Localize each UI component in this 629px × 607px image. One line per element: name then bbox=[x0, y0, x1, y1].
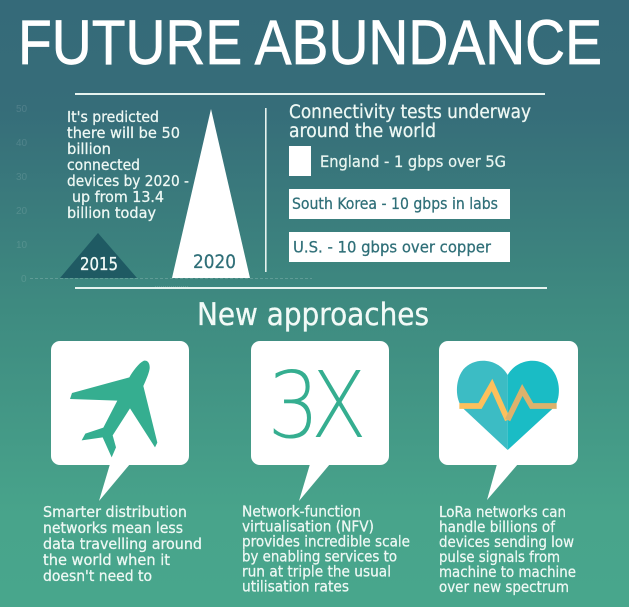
caption: machine to machine bbox=[439, 563, 576, 581]
panel: smarter distribution bbox=[43, 341, 202, 585]
icon: heart with pulse bbox=[457, 361, 559, 450]
row: South Korea bbox=[289, 189, 510, 219]
panel: connectivity tests bbox=[289, 102, 531, 262]
caption: virtualisation (NFV) bbox=[242, 518, 374, 536]
chart axis labels: 30 bbox=[16, 172, 28, 183]
stat text: 50 billion devices: devices by 2020 - bbox=[67, 172, 189, 190]
caption: networks mean less bbox=[43, 519, 183, 537]
row: U.S. bbox=[289, 232, 510, 262]
connectivity heading: around the world bbox=[289, 121, 436, 142]
caption: data travelling around bbox=[43, 535, 202, 553]
triangle bar: 2015 bbox=[60, 233, 137, 278]
row: England bbox=[289, 146, 506, 176]
caption: run at triple the usual bbox=[242, 562, 391, 580]
caption: LoRa networks can bbox=[439, 503, 566, 521]
chart axis labels: 20 bbox=[16, 206, 28, 217]
speech bubble bbox=[251, 341, 389, 501]
caption: utilisation rates bbox=[242, 578, 349, 596]
caption: doesn't need to bbox=[43, 567, 152, 585]
chart axis labels: 50 bbox=[16, 104, 28, 115]
caption: over new spectrum bbox=[439, 578, 569, 596]
stat text: 50 billion devices: there will be 50 bbox=[67, 124, 180, 142]
chart axis labels: 40 bbox=[16, 138, 28, 149]
stat text: 50 billion devices bbox=[67, 108, 189, 222]
stat text: 50 billion devices: connected bbox=[67, 156, 140, 174]
triangle bar: 2015: 2015 bbox=[80, 254, 118, 275]
stat text: 50 billion devices: billion today bbox=[67, 204, 156, 222]
caption: devices sending low bbox=[439, 533, 574, 551]
caption bbox=[43, 503, 202, 585]
row: South Korea: South Korea - 10 gbps in labs bbox=[292, 194, 498, 213]
triangle bar: 2020: 2020 bbox=[193, 251, 236, 273]
row: U.S.: U.S. - 10 gbps over copper bbox=[293, 238, 491, 256]
chart axis labels bbox=[16, 104, 28, 285]
stat text: 50 billion devices: It's predicted bbox=[67, 108, 159, 126]
triangle bar: 2020 bbox=[172, 109, 250, 278]
caption: provides incredible scale bbox=[242, 532, 410, 550]
caption: the world when it bbox=[43, 551, 171, 569]
chart axis labels: 10 bbox=[16, 240, 28, 251]
caption: handle billions of bbox=[439, 518, 556, 536]
icon: 3X: 3X bbox=[268, 351, 367, 459]
caption bbox=[439, 503, 576, 596]
panel: connected devices chart bbox=[16, 104, 312, 287]
icon: airplane bbox=[70, 361, 157, 457]
caption: by enabling services to bbox=[242, 548, 397, 566]
panel: network-function virtualisation bbox=[242, 341, 410, 596]
connectivity heading: Connectivity tests underway bbox=[289, 102, 531, 123]
row: England: England - 1 gbps over 5G bbox=[320, 152, 506, 171]
chart axis labels: 0 bbox=[21, 274, 27, 285]
caption: pulse signals from bbox=[439, 548, 560, 566]
stat text: 50 billion devices: billion bbox=[67, 140, 111, 158]
stat text: 50 billion devices: up from 13.4 bbox=[72, 188, 164, 206]
connectivity heading bbox=[289, 102, 531, 142]
caption bbox=[242, 502, 410, 596]
caption: Network-function bbox=[242, 502, 361, 520]
panel: LoRa networks bbox=[439, 341, 578, 596]
speech bubble bbox=[439, 341, 578, 500]
caption: Smarter distribution bbox=[43, 503, 187, 521]
heading: new approaches: New approaches bbox=[197, 297, 429, 333]
speech bubble bbox=[51, 341, 189, 501]
